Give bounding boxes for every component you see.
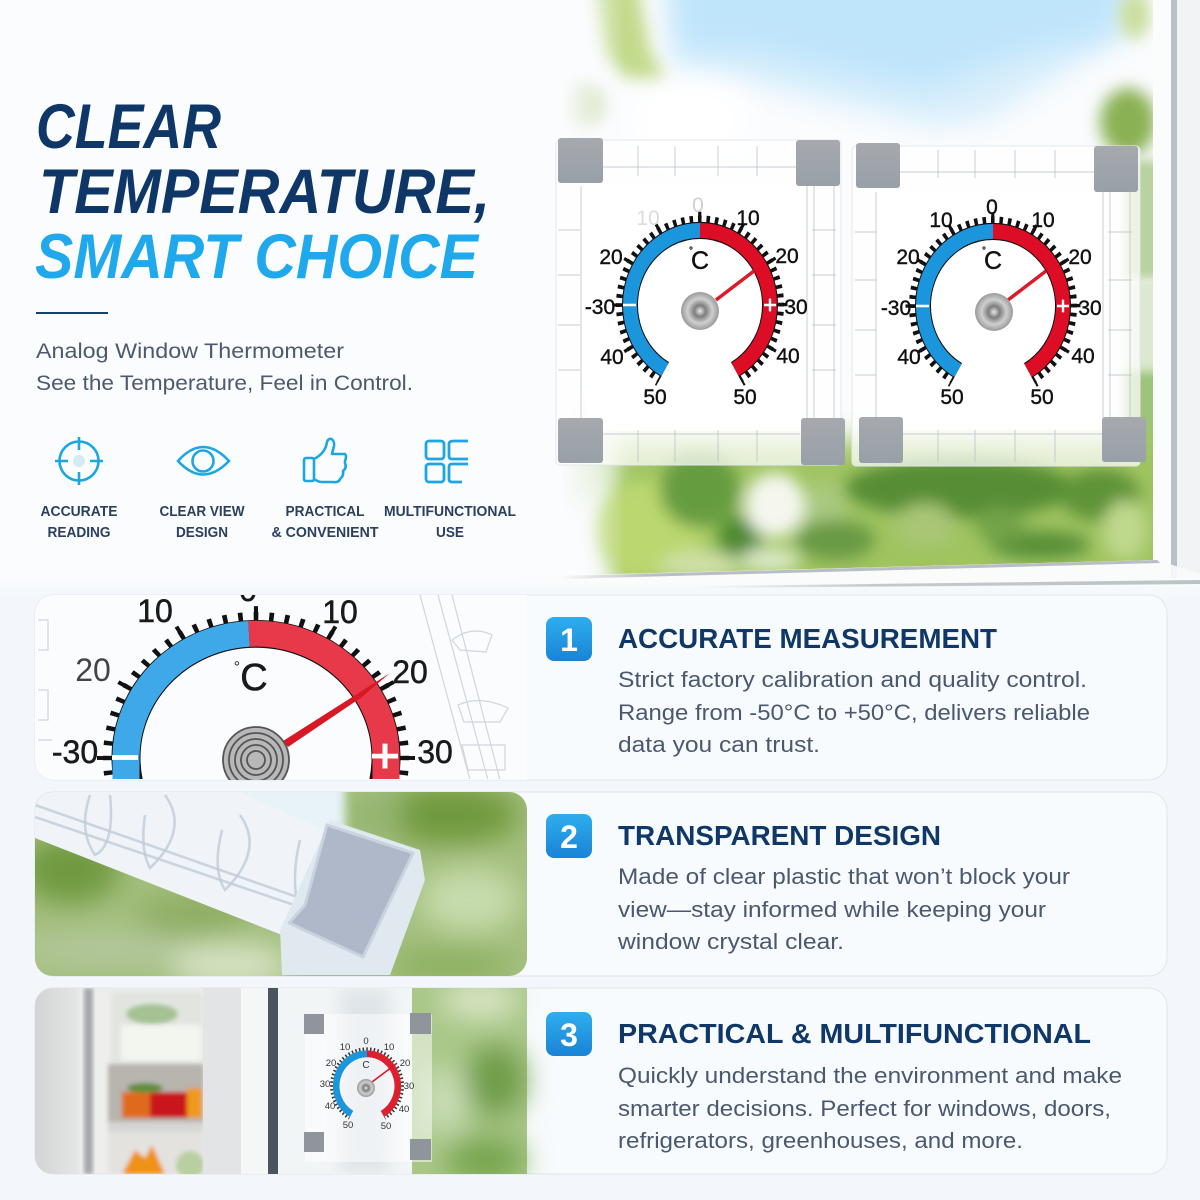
thermometer 1 [556, 138, 845, 465]
dial numbers: 10 [322, 594, 358, 630]
small thermometer frame: 20 [326, 1058, 336, 1069]
body text: refrigerators, greenhouses, and more. [618, 1128, 1023, 1153]
dial numbers: ° [234, 659, 240, 676]
plastic bar [35, 792, 322, 934]
title: CLEAR [36, 92, 221, 162]
dial numbers [53, 595, 452, 764]
body text: Strict factory calibration and quality control. [618, 667, 1087, 692]
heading: TRANSPARENT DESIGN [618, 820, 941, 851]
dial numbers: 10 [1031, 209, 1055, 232]
number badge [546, 814, 592, 858]
dial numbers: ° [689, 246, 693, 257]
dial numbers: 50 [1030, 386, 1054, 409]
background photo: window view [568, 0, 1153, 574]
heading: ACCURATE MEASUREMENT [618, 623, 997, 654]
body text: smarter decisions. Perfect for windows, doors, [618, 1096, 1111, 1121]
needle [283, 673, 390, 747]
dial numbers: 30 [784, 296, 808, 319]
title: SMART CHOICE [35, 222, 480, 292]
number badge [546, 617, 592, 661]
feature labels: USE [436, 525, 464, 541]
dial numbers: 0 [692, 194, 704, 217]
subtitle [36, 339, 413, 395]
needle [716, 271, 754, 300]
dial numbers: -30 [881, 297, 911, 320]
small thermometer frame [304, 1013, 432, 1162]
photo: dial close-up [35, 595, 527, 780]
small thermometer frame: 50 [381, 1121, 391, 1132]
dial numbers: 40 [776, 345, 800, 368]
dial [618, 218, 782, 381]
dial numbers: C [984, 247, 1002, 275]
dial numbers: 40 [897, 346, 921, 369]
dial numbers: 10 [929, 209, 953, 232]
thermometer 2 [852, 143, 1146, 466]
small thermometer frame: C [362, 1060, 370, 1071]
dial numbers: 20 [599, 246, 623, 269]
window frame [480, 0, 1200, 588]
feature labels: & CONVENIENT [272, 525, 379, 541]
dial numbers: 20 [775, 245, 799, 268]
frame [556, 140, 841, 465]
dial numbers [585, 194, 808, 409]
dial numbers: -30 [585, 296, 615, 319]
rubber corner pads [856, 143, 1146, 463]
dial numbers [881, 196, 1102, 409]
panel 1: accurate measurement [34, 594, 1168, 780]
dial numbers: 40 [600, 346, 624, 369]
dial numbers: 20 [1068, 246, 1092, 269]
photo: plastic frame corner [35, 792, 527, 976]
needle [1008, 271, 1046, 300]
dial numbers: -30 [52, 734, 98, 770]
dial numbers: 50 [940, 386, 964, 409]
spiral coil [975, 293, 1013, 331]
dial numbers: 50 [733, 386, 757, 409]
panel 2: transparent design [34, 792, 1168, 976]
icon: thumbs up [304, 439, 346, 482]
body text [618, 1063, 1122, 1153]
dial numbers: 10 [636, 207, 660, 230]
dial numbers: 0 [239, 572, 257, 608]
number badge: 2 [560, 819, 578, 855]
small thermometer frame: 10 [384, 1042, 394, 1053]
feature labels: MULTIFUNCTIONAL [384, 504, 516, 520]
clear base [280, 820, 425, 975]
dial numbers: 20 [75, 652, 111, 688]
panel 3: practical and multifunctional [35, 982, 1167, 1182]
divider [36, 312, 108, 314]
spiral coil [681, 292, 719, 330]
dial numbers: 10 [736, 207, 760, 230]
small thermometer frame: 50 [343, 1120, 353, 1131]
small thermometer frame: 0 [363, 1036, 369, 1047]
dial numbers: 30 [1078, 297, 1102, 320]
small thermometer frame: 30 [320, 1079, 330, 1090]
title [35, 92, 490, 292]
icon: target [55, 437, 103, 485]
body text: window crystal clear. [617, 929, 844, 954]
dial numbers: 50 [643, 386, 667, 409]
body text: Range from -50°C to +50°C, delivers reliable [618, 700, 1090, 725]
subtitle: See the Temperature, Feel in Control. [36, 371, 413, 395]
number badge [546, 1012, 592, 1056]
body text: Quickly understand the environment and make [618, 1063, 1122, 1088]
body text: view—stay informed while keeping your [618, 897, 1047, 922]
small thermometer frame: 20 [400, 1058, 410, 1069]
body text: data you can trust. [618, 732, 820, 757]
body text: Made of clear plastic that won’t block your [618, 864, 1071, 889]
body text [618, 667, 1090, 757]
small thermometer frame: 10 [340, 1042, 350, 1053]
feature labels: ACCURATE [40, 504, 118, 520]
subtitle: Analog Window Thermometer [36, 339, 344, 363]
number badge: 1 [560, 622, 578, 658]
dial numbers: 30 [417, 734, 453, 770]
small thermometer frame: 30 [404, 1081, 414, 1092]
feature labels: CLEAR VIEW [160, 504, 245, 520]
dial numbers: 20 [896, 246, 920, 269]
icon: four squares [426, 441, 468, 482]
dial numbers: ° [982, 246, 986, 257]
feature labels [40, 504, 516, 541]
number badge: 3 [560, 1017, 578, 1053]
feature labels: READING [48, 525, 110, 541]
dial numbers: C [691, 247, 709, 275]
photo: fridge door with thermometer [35, 982, 527, 1182]
spiral coil [222, 726, 290, 780]
dial numbers: C [240, 657, 268, 699]
feature labels: PRACTICAL [286, 504, 365, 520]
small thermometer frame: 40 [399, 1104, 409, 1115]
heading: PRACTICAL & MULTIFUNCTIONAL [618, 1018, 1091, 1049]
dial numbers: 10 [137, 593, 173, 629]
title: TEMPERATURE, [39, 157, 490, 227]
dial numbers: 0 [986, 196, 998, 219]
feature labels: DESIGN [176, 525, 228, 541]
frame [852, 146, 1140, 466]
body text [617, 864, 1071, 954]
dial [911, 219, 1075, 382]
dial numbers: 20 [392, 654, 428, 690]
dial numbers: 40 [1071, 345, 1095, 368]
rubber corner pads [558, 138, 845, 465]
icon: eye [178, 447, 229, 474]
small thermometer frame: 40 [325, 1101, 335, 1112]
grey suction pad [289, 825, 413, 957]
